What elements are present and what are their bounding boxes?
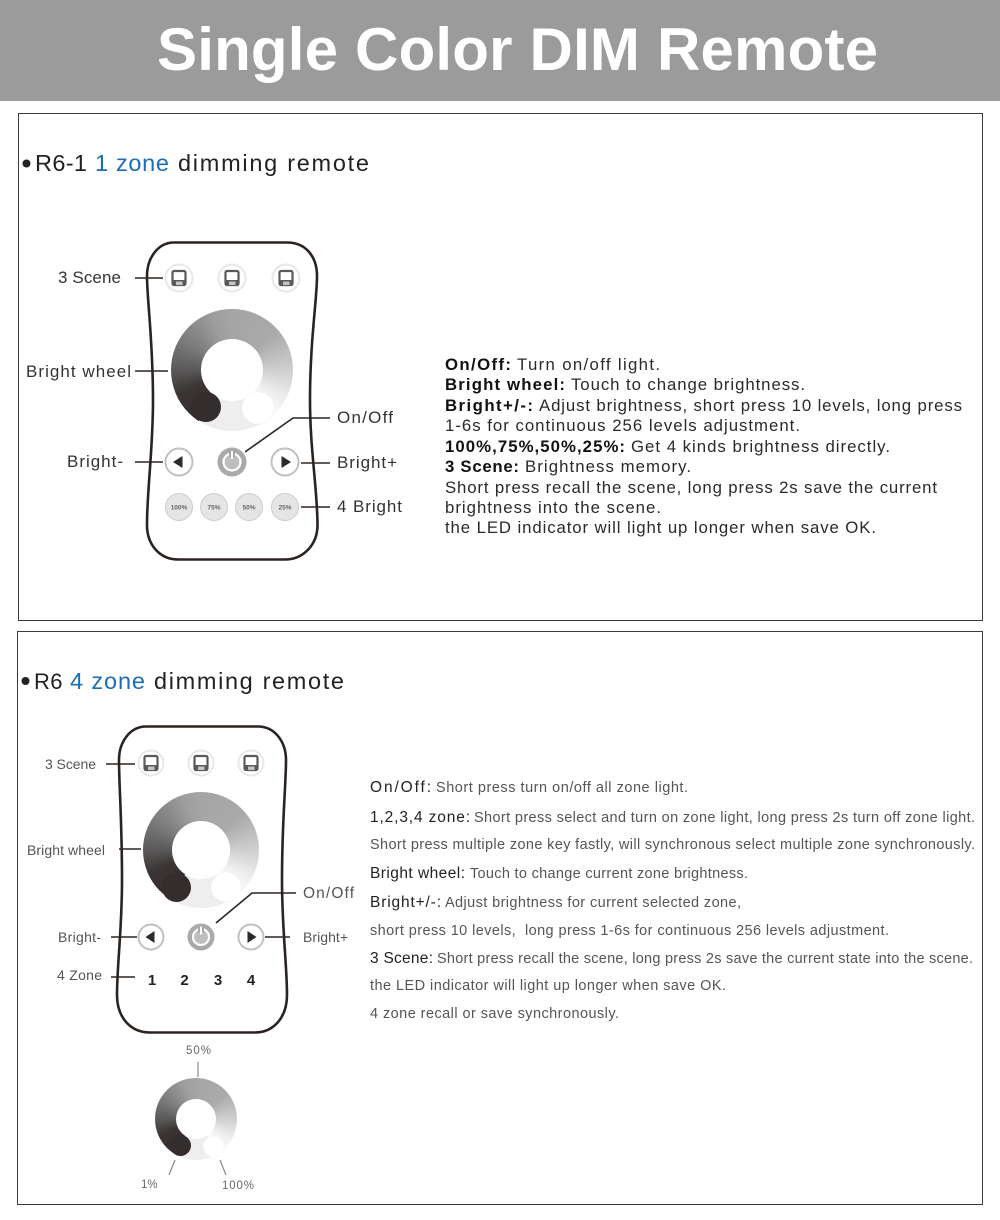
brightness wheel (171, 309, 293, 431)
line: 3 Scene: 3 Scene: (445, 457, 519, 476)
callout: 4 Bright (301, 497, 402, 516)
line: Bright wheel (370, 865, 748, 882)
callout: 3 Scene (58, 268, 163, 287)
line: Bright wheel: Touch to change current zone brightness. (470, 866, 748, 882)
panel: R6-1 1 zone dimming remote (18, 113, 983, 621)
line: zones: Short press select and turn on zone light, long press 2s turn off zone light. (474, 810, 975, 826)
remote diagram: R6-1 (26, 242, 402, 560)
remote body outline (117, 726, 287, 1032)
callout: Bright+: Bright+ (303, 929, 348, 945)
line: 3 Scene: 3 Scene: (370, 950, 433, 967)
line: Bright wheel: Bright wheel: (445, 375, 565, 394)
callout: 3 Scene: 3 Scene (45, 756, 96, 772)
small wheel diagram: dimming range (141, 1045, 254, 1192)
heading: R6: dimming remote (154, 668, 344, 694)
heading: R6-1: R6-1 (35, 150, 87, 176)
bright plus button (272, 448, 298, 476)
line: Bright+/-: Adjust brightness, short press 10 levels, long press (539, 396, 962, 415)
callout: Bright-: Bright- (58, 929, 101, 945)
line: Bright+/-: Adjust brightness for current selected zone, (445, 895, 741, 911)
line: scene recall: Short press recall the scene, long press 2s save the current (445, 478, 937, 497)
label: 100%: 100% (222, 1180, 254, 1192)
description text: R6-1 (445, 355, 962, 537)
line: Bright wheel: Touch to change brightness. (571, 375, 805, 394)
heading: R6-1 (22, 150, 369, 176)
callout: Bright+: Bright+ (337, 453, 397, 472)
bright plus button (238, 924, 264, 950)
heading: R6 (22, 668, 344, 694)
line: 3 Scene: Brightness memory. (525, 457, 691, 476)
line: LED indicator: the LED indicator will light up longer when save OK. (370, 978, 726, 994)
line: zones: 1,2,3,4 zone: (370, 809, 470, 826)
title: Single Color DIM Remote (157, 16, 878, 83)
callout: Bright wheel (27, 842, 141, 858)
zone numbers: 4 (247, 972, 256, 989)
bright minus button (166, 448, 192, 476)
callout: 3 Scene: 3 Scene (58, 268, 121, 287)
callout: On/Off (216, 885, 355, 923)
line: On/Off: Short press turn on/off all zone light. (436, 780, 688, 796)
line: continuous adjustment: 1-6s for continuous 256 levels adjustment. (445, 416, 800, 435)
line: On/Off: Turn on/off light. (517, 355, 660, 374)
line: 3 Scene (445, 457, 691, 476)
heading: R6: 4 zone (70, 668, 145, 694)
line: press levels: short press 10 levels, long press 1-6s for continuous 256 levels adjustment. (370, 923, 889, 939)
line: Bright+/-: Bright+/-: (445, 396, 533, 415)
scene buttons (166, 264, 300, 292)
callout: On/Off: On/Off (337, 408, 393, 427)
line: Bright wheel (445, 375, 805, 394)
small wheel (155, 1078, 237, 1160)
label: 1% (141, 1160, 175, 1191)
line: preset brightness: Get 4 kinds brightness directly. (631, 437, 890, 456)
remote body outline (147, 242, 318, 560)
preset brightness buttons (166, 494, 298, 520)
heading: R6: R6 (34, 669, 62, 694)
line: 3 Scene: Short press recall the scene, long press 2s save the current state into the scene. (437, 951, 973, 967)
preset brightness buttons: 100% (171, 504, 188, 512)
callout: Bright- (58, 929, 137, 945)
zone numbers: 1 (148, 972, 156, 989)
line: Bright wheel: Bright wheel: (370, 865, 465, 882)
zone numbers: 2 (180, 972, 189, 989)
power button (218, 448, 246, 476)
zone numbers: 3 (214, 972, 222, 989)
line: synchronous: 4 zone recall or save synchronously. (370, 1006, 619, 1022)
preset brightness buttons: 75% (207, 504, 221, 512)
preset brightness buttons: 25% (278, 504, 292, 512)
line: preset brightness (445, 437, 890, 456)
callout: 4 Bright: 4 Bright (337, 497, 402, 516)
callout: 3 Scene (45, 756, 135, 772)
callout: Bright wheel: Bright wheel (27, 842, 105, 858)
line: Bright+/-: Bright+/-: (370, 894, 441, 911)
power button (188, 924, 214, 950)
line: multiple zones: Short press multiple zone key fastly, will synchronous select multiple zone synchronously. (370, 837, 975, 853)
heading: R6-1: 1 zone (95, 150, 169, 176)
line: preset brightness: 100%,75%,50%,25%: (445, 437, 625, 456)
callout: 4 Zone (57, 967, 135, 983)
callout: On/Off (245, 408, 393, 452)
line: On/Off: On/Off: (445, 355, 511, 374)
callout: Bright- (67, 452, 163, 471)
callout: 4 Zone: 4 Zone (57, 967, 102, 983)
panel: R6 4 zone dimming remote (17, 631, 983, 1205)
callout: Bright wheel: Bright wheel (26, 362, 131, 381)
callout: Bright-: Bright- (67, 452, 123, 471)
description text: R6 (370, 779, 975, 1022)
line: LED indicator: the LED indicator will light up longer when save OK. (445, 518, 876, 537)
brightness wheel (143, 792, 259, 908)
label: 50%: 50% (186, 1045, 211, 1057)
label: 100% (220, 1160, 254, 1192)
label: 50% (186, 1045, 211, 1077)
scene buttons (138, 750, 264, 776)
callout: Bright+ (301, 453, 397, 472)
line: On/Off: On/Off: (370, 779, 431, 796)
callout: Bright+ (265, 929, 348, 945)
heading: R6-1: dimming remote (178, 150, 369, 176)
preset brightness buttons: 50% (242, 504, 256, 512)
label: 1%: 1% (141, 1179, 158, 1191)
header banner (0, 0, 1000, 101)
line: On/Off (445, 355, 660, 374)
callout: On/Off: On/Off (303, 885, 355, 902)
bright minus button (138, 924, 164, 950)
zone numbers (148, 972, 256, 989)
remote diagram: R6 (27, 726, 355, 1032)
line: scene save: brightness into the scene. (445, 498, 661, 517)
